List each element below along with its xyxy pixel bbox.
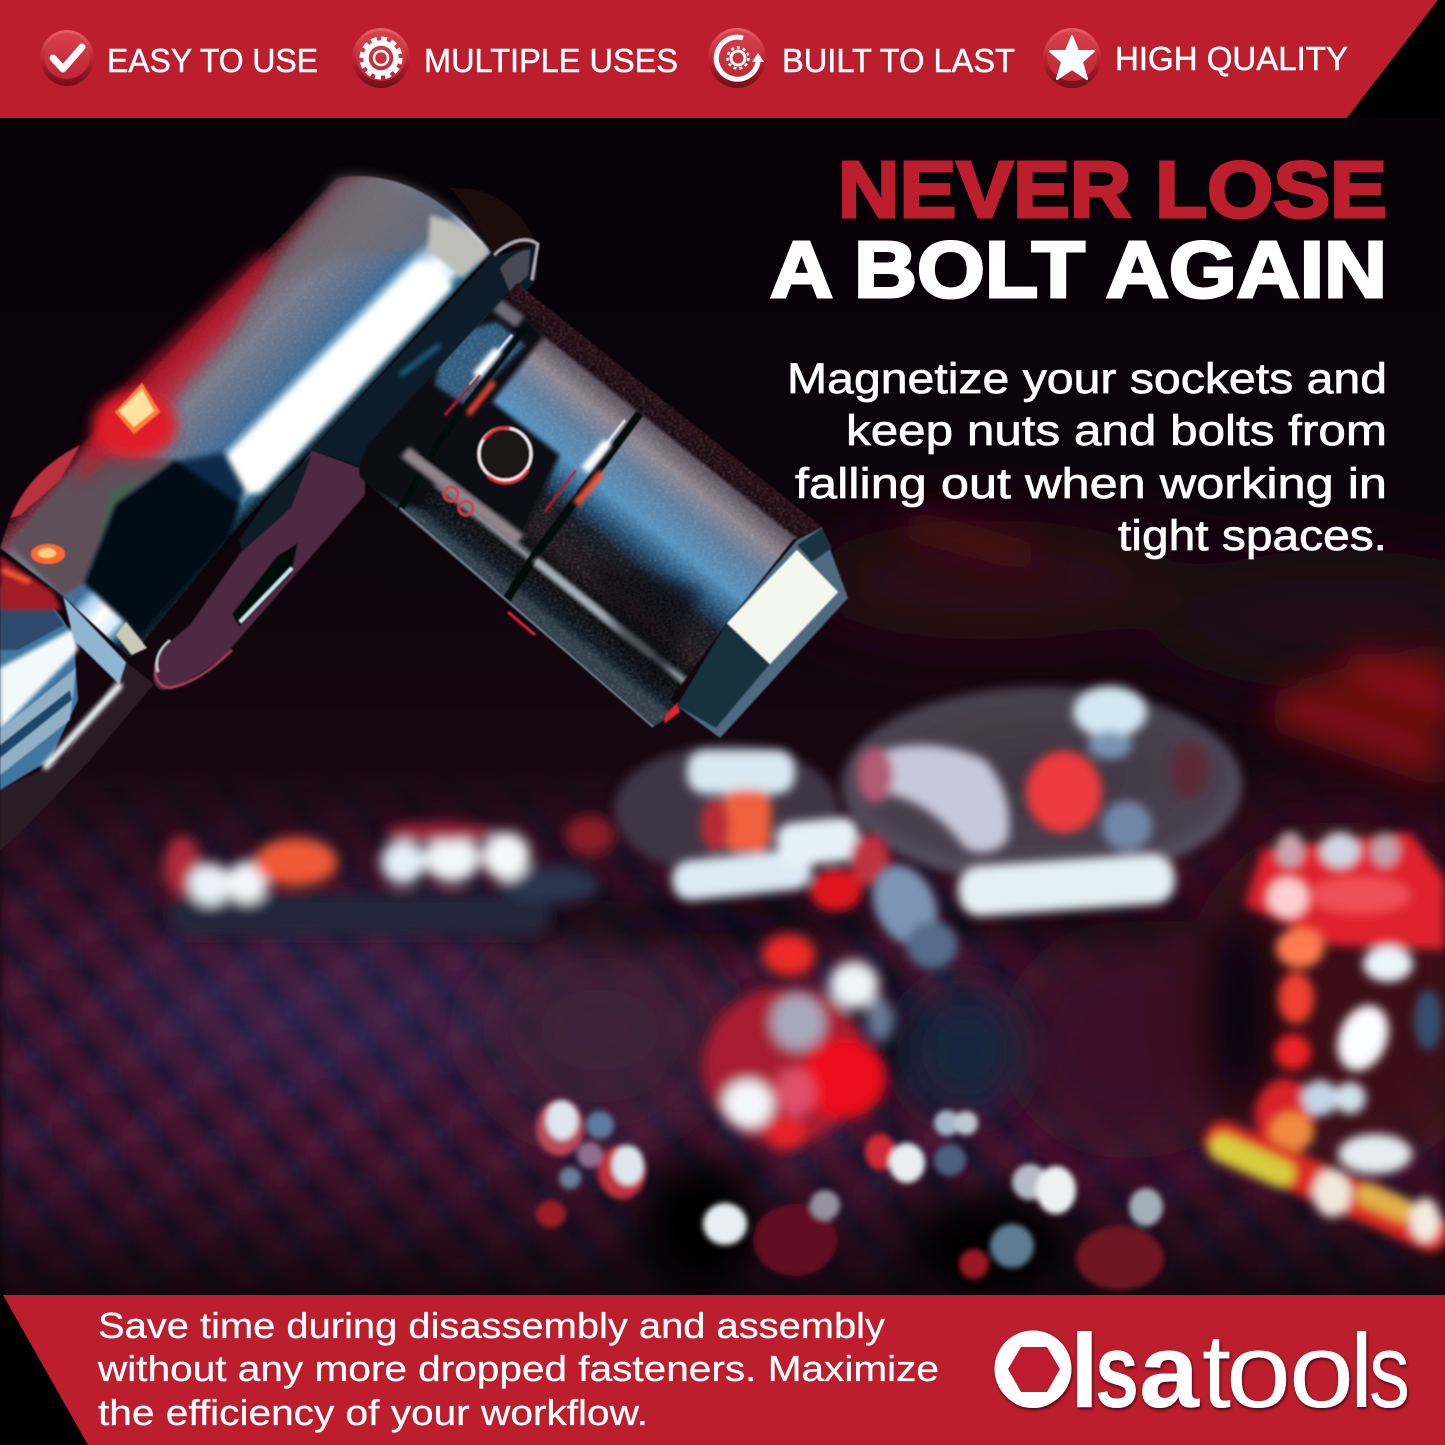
blurred socket and red ball — [703, 934, 894, 1151]
icon: check — [40, 30, 94, 86]
blurred highlights large ratchet — [857, 686, 1210, 969]
socket wrench in focus — [0, 176, 848, 850]
photo background — [0, 237, 1445, 1295]
blue under stripe — [175, 452, 245, 530]
pale head end — [428, 215, 491, 278]
red edge glow — [75, 252, 272, 485]
red glint edge — [508, 612, 535, 635]
blurred ratchet heads — [614, 687, 1242, 883]
flat arm with holes — [153, 450, 365, 690]
socket body — [350, 283, 830, 733]
socket neck dark section — [350, 290, 545, 510]
bottom corner wedge — [0, 1290, 88, 1445]
description text — [787, 355, 1387, 560]
logo: Olsatools: a — [1139, 1313, 1201, 1430]
icon: star — [1043, 28, 1101, 88]
orange glint — [115, 383, 160, 434]
right corner wedge — [1347, 0, 1445, 118]
logo: Olsatools: l — [1350, 1313, 1373, 1430]
dark band middle neck — [395, 400, 560, 540]
feature: multiple uses: MULTIPLE USES — [424, 42, 678, 79]
bottom banner — [3, 1295, 1445, 1445]
ring shadows — [400, 328, 525, 510]
feature: multiple uses — [352, 28, 678, 88]
lower left chrome arm — [0, 556, 154, 850]
headline: NEVER LOSE — [838, 145, 1387, 234]
headline: A BOLT AGAIN — [770, 225, 1387, 314]
dark lower reflection — [84, 460, 239, 636]
white highlight stripe — [222, 262, 452, 493]
chrome band neck — [405, 452, 520, 540]
ratchet rim — [312, 188, 538, 468]
description text: keep nuts and bolts from — [846, 407, 1387, 455]
icon: gear — [352, 28, 410, 88]
end red glint — [664, 702, 680, 724]
carbon weave mat — [0, 740, 1445, 1300]
bottom text: without any more dropped fasteners. Maximize — [97, 1348, 939, 1389]
red reflection glow — [93, 391, 177, 459]
silver lower left body — [10, 450, 175, 596]
ring bright highlights — [470, 335, 512, 385]
feature: easy to use: EASY TO USE — [107, 42, 318, 79]
arm hole upper — [239, 455, 312, 552]
icon: cycle gear — [708, 28, 766, 88]
logo: Olsatools: s — [1095, 1313, 1139, 1430]
logo: Olsatools: t — [1202, 1313, 1231, 1430]
engraved digits mark — [444, 487, 473, 515]
blurred left tool — [164, 815, 615, 935]
logo: Olsatools — [994, 1310, 1410, 1430]
top feature banner — [0, 0, 1438, 118]
ratchet head cylinder — [0, 176, 491, 658]
description text: tight spaces. — [1118, 512, 1387, 560]
description text: falling out when working in — [795, 460, 1387, 508]
feature: high quality: HIGH QUALITY — [1115, 40, 1348, 77]
blurred dark bands — [490, 904, 1266, 1295]
blurred bokeh bottom centre — [536, 1100, 1164, 1290]
blurred red stripes top right — [903, 509, 1445, 790]
lower orange glint — [31, 544, 65, 564]
logo: Olsatools: o — [1289, 1313, 1354, 1430]
logo: Olsatools: O — [995, 1310, 1071, 1430]
feature: high quality — [1043, 28, 1348, 88]
blurred highlights centre ratchet — [670, 750, 890, 911]
bottom text — [97, 1305, 939, 1433]
blurred highlights right tool — [1199, 832, 1445, 1257]
description text: Magnetize your sockets and — [787, 355, 1387, 403]
bottom text: the efficiency of your workflow. — [98, 1392, 648, 1433]
feature: built to last — [708, 28, 1015, 88]
headline — [770, 145, 1387, 314]
blue tint on mat — [110, 940, 550, 1080]
logo: Olsatools: s — [1369, 1313, 1410, 1430]
bottom edge highlight — [400, 508, 653, 727]
logo: Olsatools: l — [1070, 1313, 1099, 1430]
feature: easy to use — [40, 30, 318, 86]
square drive end — [677, 527, 848, 738]
ring red glints — [468, 382, 494, 414]
arm hole lower — [232, 543, 298, 627]
feature: built to last: BUILT TO LAST — [782, 42, 1015, 79]
size marking ring — [479, 428, 531, 480]
lower chrome stripe — [535, 560, 652, 655]
upper left red wedge — [10, 445, 80, 518]
socket texture — [360, 283, 830, 733]
logo: Olsatools: o — [1226, 1313, 1291, 1430]
near-end dark shading — [590, 560, 700, 690]
silver top overlay — [265, 177, 480, 285]
bottom text: Save time during disassembly and assembly — [98, 1305, 885, 1346]
right side haze and shadow — [490, 520, 1445, 1180]
